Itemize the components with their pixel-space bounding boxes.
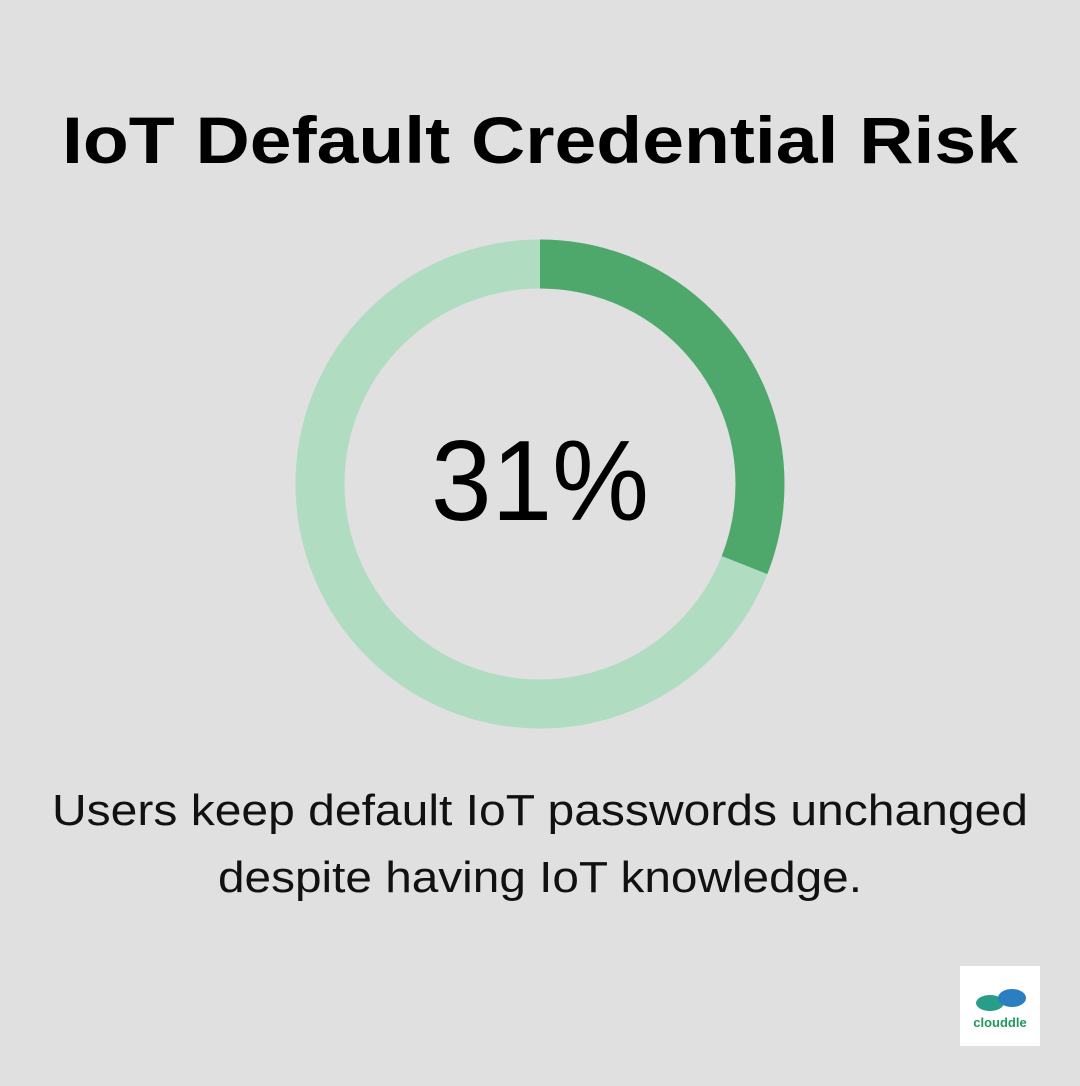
caption	[52, 786, 1028, 902]
logo: clouddle	[960, 966, 1040, 1046]
caption: Users keep default IoT passwords unchanged	[52, 786, 1028, 835]
donut chart	[320, 264, 760, 704]
title: IoT Default Credential Risk	[62, 103, 1018, 177]
logo: clouddle: clouddle	[973, 1015, 1027, 1030]
caption: despite having IoT knowledge.	[218, 853, 862, 902]
percentage value: 31%	[431, 418, 649, 545]
